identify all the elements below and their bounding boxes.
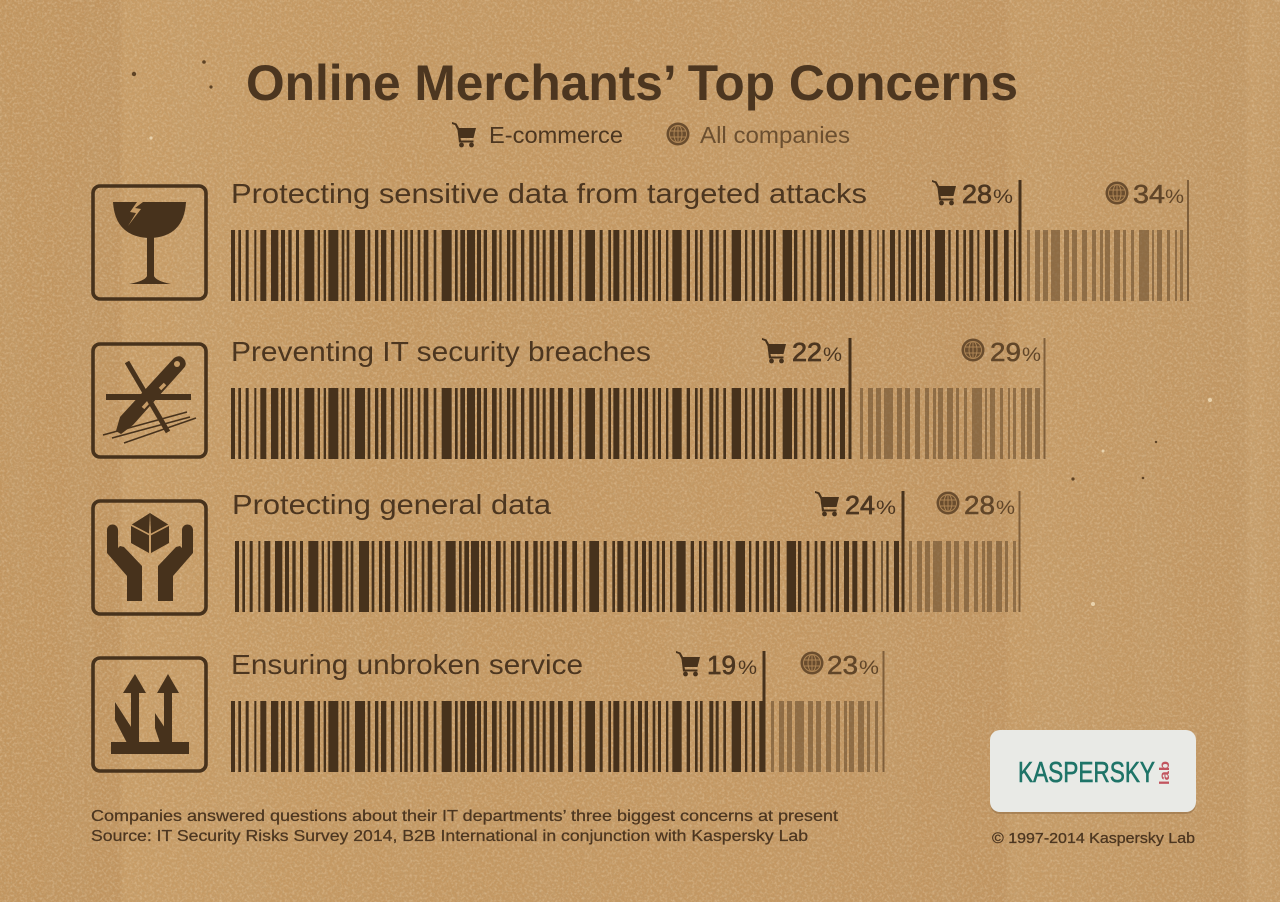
e-commerce value: 19 bbox=[707, 650, 736, 680]
marker line: all companies bbox=[1187, 180, 1189, 301]
icon: fragile broken glass bbox=[93, 186, 206, 299]
label: Protecting general data bbox=[232, 489, 551, 520]
marker line: all companies bbox=[882, 651, 884, 772]
all companies value bbox=[800, 650, 879, 680]
all companies value bbox=[962, 337, 1041, 367]
barcode bar: e-commerce 24% bbox=[235, 541, 900, 612]
logo sticker: Kaspersky Lab: KASPERSKY bbox=[1018, 757, 1155, 789]
icon: handle with care hands and box bbox=[93, 501, 206, 614]
e-commerce value: 24 bbox=[845, 490, 875, 520]
legend label: all companies: All companies bbox=[700, 122, 850, 148]
barcode bar: e-commerce 22% bbox=[231, 388, 848, 459]
label: Protecting sensitive data from targeted attacks bbox=[231, 178, 867, 209]
all companies value bbox=[1106, 179, 1184, 209]
barcode bar: all companies 28% bbox=[909, 541, 1016, 612]
logo sticker: Kaspersky Lab: lab bbox=[1156, 761, 1172, 785]
icon: legend globe bbox=[666, 122, 690, 146]
title: Online Merchants’ Top Concerns bbox=[246, 55, 1018, 111]
row 3: protecting general data bbox=[93, 489, 1020, 614]
barcode bar: e-commerce 28% bbox=[231, 230, 1020, 301]
marker line: e-commerce bbox=[902, 491, 904, 612]
footnote: Source: IT Security Risks Survey 2014, B2B International in conjunction with Kaspersky Lab bbox=[91, 828, 808, 845]
marker line: e-commerce bbox=[848, 338, 852, 459]
row 2: preventing IT security breaches bbox=[93, 336, 1046, 459]
e-commerce value: % bbox=[823, 345, 842, 366]
marker line: e-commerce bbox=[1018, 180, 1022, 301]
row 1: protecting sensitive data bbox=[93, 178, 1189, 301]
footnote bbox=[91, 808, 839, 845]
icon: this way up arrows bbox=[93, 658, 206, 771]
barcode bar: e-commerce 19% bbox=[231, 701, 763, 772]
icon: do not cut with knife bbox=[93, 344, 206, 457]
all companies value: % bbox=[996, 498, 1015, 519]
all companies value: 34 bbox=[1133, 179, 1165, 209]
all companies value: % bbox=[1022, 345, 1041, 366]
copyright: © 1997-2014 Kaspersky Lab bbox=[992, 830, 1195, 847]
footnote: Companies answered questions about their IT departments’ three biggest concerns at present bbox=[91, 808, 839, 825]
marker line: all companies bbox=[1018, 491, 1020, 612]
all companies value: 28 bbox=[964, 490, 995, 520]
e-commerce value bbox=[762, 337, 842, 367]
legend bbox=[452, 122, 850, 148]
row 4: ensuring unbroken service bbox=[93, 649, 884, 772]
all companies value: % bbox=[1165, 187, 1184, 208]
e-commerce value bbox=[932, 179, 1013, 209]
barcode bar: all companies 29% bbox=[860, 388, 1041, 459]
barcode bar: all companies 34% bbox=[1027, 230, 1185, 301]
all companies value bbox=[936, 490, 1015, 520]
label: Ensuring unbroken service bbox=[231, 649, 583, 680]
e-commerce value: 28 bbox=[962, 179, 992, 209]
icon: legend cart bbox=[452, 122, 476, 147]
e-commerce value: % bbox=[993, 187, 1013, 208]
label: Preventing IT security breaches bbox=[231, 336, 651, 367]
all companies value: % bbox=[859, 658, 879, 679]
e-commerce value: % bbox=[738, 658, 757, 679]
all companies value: 23 bbox=[827, 650, 858, 680]
e-commerce value: % bbox=[876, 498, 896, 519]
logo sticker: Kaspersky Lab bbox=[990, 730, 1196, 814]
e-commerce value: 22 bbox=[792, 337, 822, 367]
all companies value: 29 bbox=[990, 337, 1021, 367]
e-commerce value bbox=[676, 650, 757, 680]
barcode bar: all companies 23% bbox=[771, 701, 881, 772]
marker line: e-commerce bbox=[762, 651, 766, 772]
legend label: e-commerce: E-commerce bbox=[489, 122, 623, 148]
marker line: all companies bbox=[1044, 338, 1046, 459]
e-commerce value bbox=[815, 490, 896, 520]
